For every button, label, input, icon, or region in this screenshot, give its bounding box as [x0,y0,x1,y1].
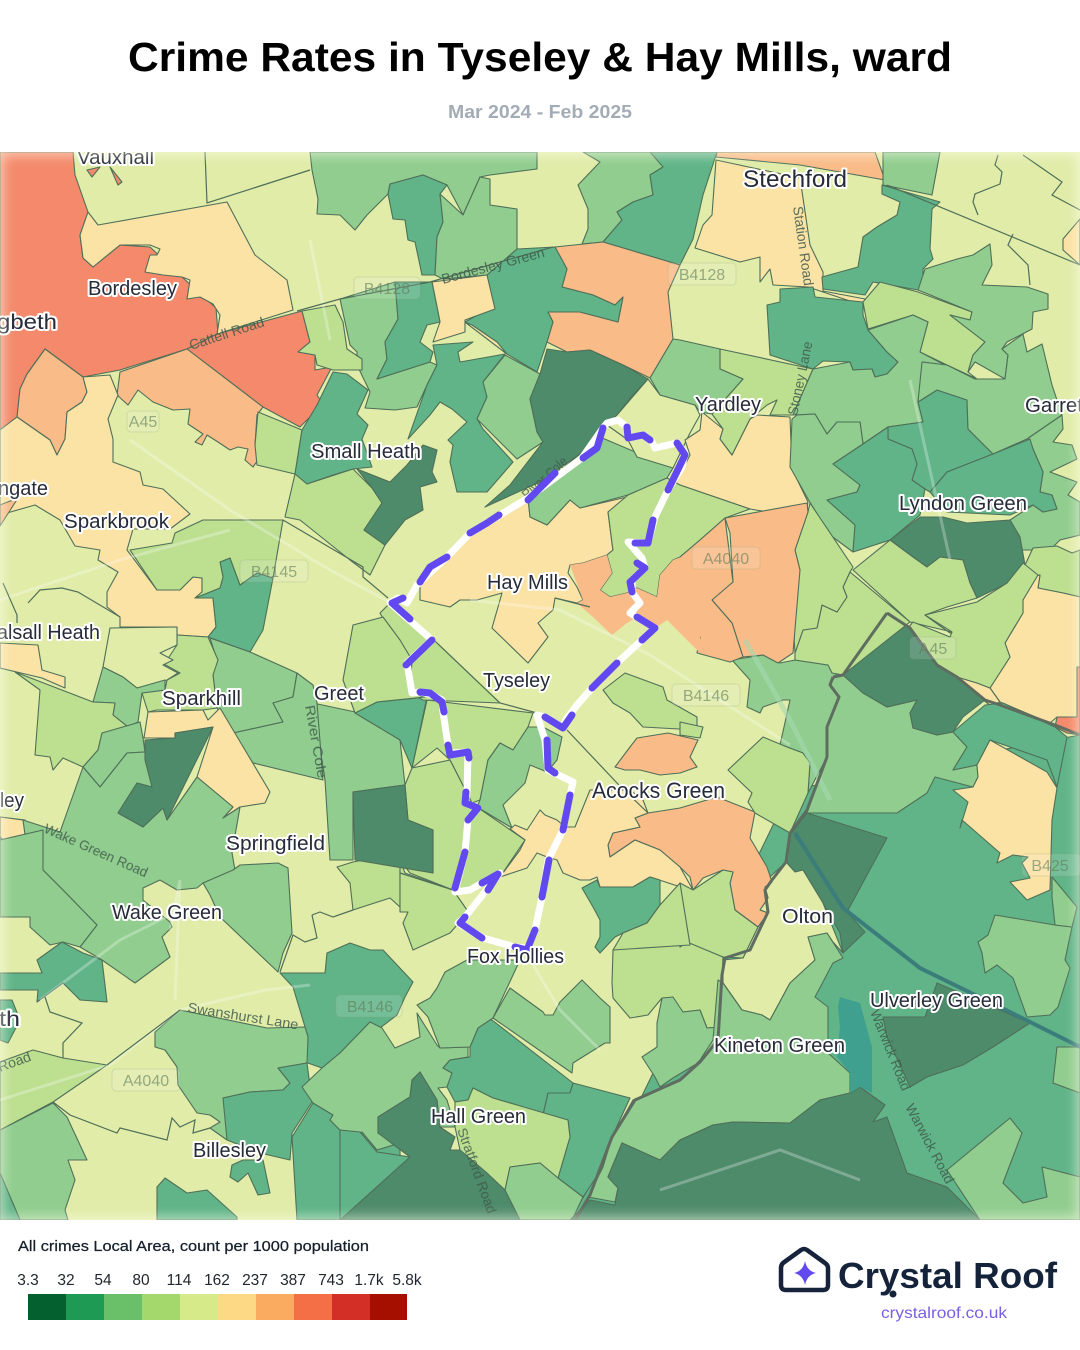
map edge fade [0,152,1080,1220]
river course [745,640,830,800]
road name labels: Station Road [790,205,817,287]
road name labels: Warwick Road [867,1007,914,1093]
place name labels: Sparkbrook [64,511,170,533]
legend scale values: 162 [204,1272,230,1289]
place name labels: Olton [782,906,833,928]
icon: house with star [778,1246,830,1292]
road name labels: Swanshurst Lane [187,999,300,1033]
legend scale values: 5.8k [392,1272,422,1289]
legend scale values: 387 [280,1272,306,1289]
title: Crime Rates in Tyseley & Hay Mills, ward [128,34,952,80]
road name labels: Cattell Road [187,314,266,353]
road number badges: B4146 [683,688,729,705]
road number badges: B4128 [679,267,725,284]
place name labels: Stechford [743,166,847,193]
road name labels: Stratford Road [454,1126,500,1216]
legend scale values: 54 [94,1272,112,1289]
place name labels: Sparkhill [162,688,241,710]
logo wordmark: Crystal Roof [838,1255,1058,1296]
ward boundary: Tyseley and Hay Mills [390,420,685,950]
legend scale values: 3.3 [17,1272,39,1289]
neighbourhood polygons by crime band [0,152,1080,1220]
place name labels: Greet [314,683,364,705]
road number badges: A4040 [703,551,749,568]
thin boundary lines [3,152,1080,1140]
place name labels: Yardley [695,394,761,416]
legend scale values: 114 [167,1272,192,1289]
place name labels: Acocks Green [592,778,725,803]
place name labels: alsall Heath [0,622,100,644]
legend [17,1239,896,1320]
logo: Crystal Roof [778,1246,1058,1322]
legend scale values: 80 [132,1272,150,1289]
subtitle: date range: Mar 2024 - Feb 2025 [448,102,632,122]
place name labels: Billesley [193,1140,266,1162]
legend scale values: 237 [242,1272,268,1289]
legend scale values: 1.7k [354,1272,384,1289]
place name labels: Garret [1025,395,1080,417]
road name labels: River Cole [302,704,331,780]
legend title: All crimes Local Area, count per 1000 population [18,1239,369,1255]
place name labels: Hall Green [431,1106,526,1128]
legend scale values: 32 [57,1272,75,1289]
legend scale values [17,1272,422,1289]
place name labels: Wake Green [112,902,222,924]
road number badges: B4145 [251,564,297,581]
choropleth map [0,152,1080,1220]
road number badges: A45 [129,414,157,431]
road name labels: Wake Green Road [42,820,151,880]
road name labels: River Cole [518,453,571,502]
place name labels: Bordesley [88,278,177,300]
place name labels: Tyseley [483,670,550,692]
road name labels: Stoney Lane [784,340,816,417]
place name labels: Small Heath [311,441,421,463]
place name labels: Springfield [226,833,325,855]
road name labels: Warwick Road [902,1101,958,1186]
road number badges: A4040 [123,1073,169,1090]
road number badges [112,263,1080,1091]
road number badges: B4128 [364,281,410,298]
place name labels: Kineton Green [714,1035,845,1057]
website link: crystalroof.co.uk [881,1305,1008,1322]
railway line [795,833,1080,1047]
road name labels [0,205,958,1216]
road number badges: A45 [919,641,947,658]
place name labels: ley [0,790,24,812]
road name labels: Bordesley Green [440,244,546,287]
place name labels: Fox Hollies [467,946,564,968]
legend scale values: 743 [318,1272,344,1289]
faint street network [0,240,950,1190]
borough boundary [575,613,1080,1220]
road number badges: B4146 [347,999,393,1016]
place name labels: Lyndon Green [899,493,1027,515]
legend colour scale [28,1294,407,1320]
place name labels: Hay Mills [487,572,568,594]
road number badges: B425 [1031,858,1069,875]
place name labels: Ulverley Green [870,990,1003,1012]
place name labels [0,147,1080,1162]
